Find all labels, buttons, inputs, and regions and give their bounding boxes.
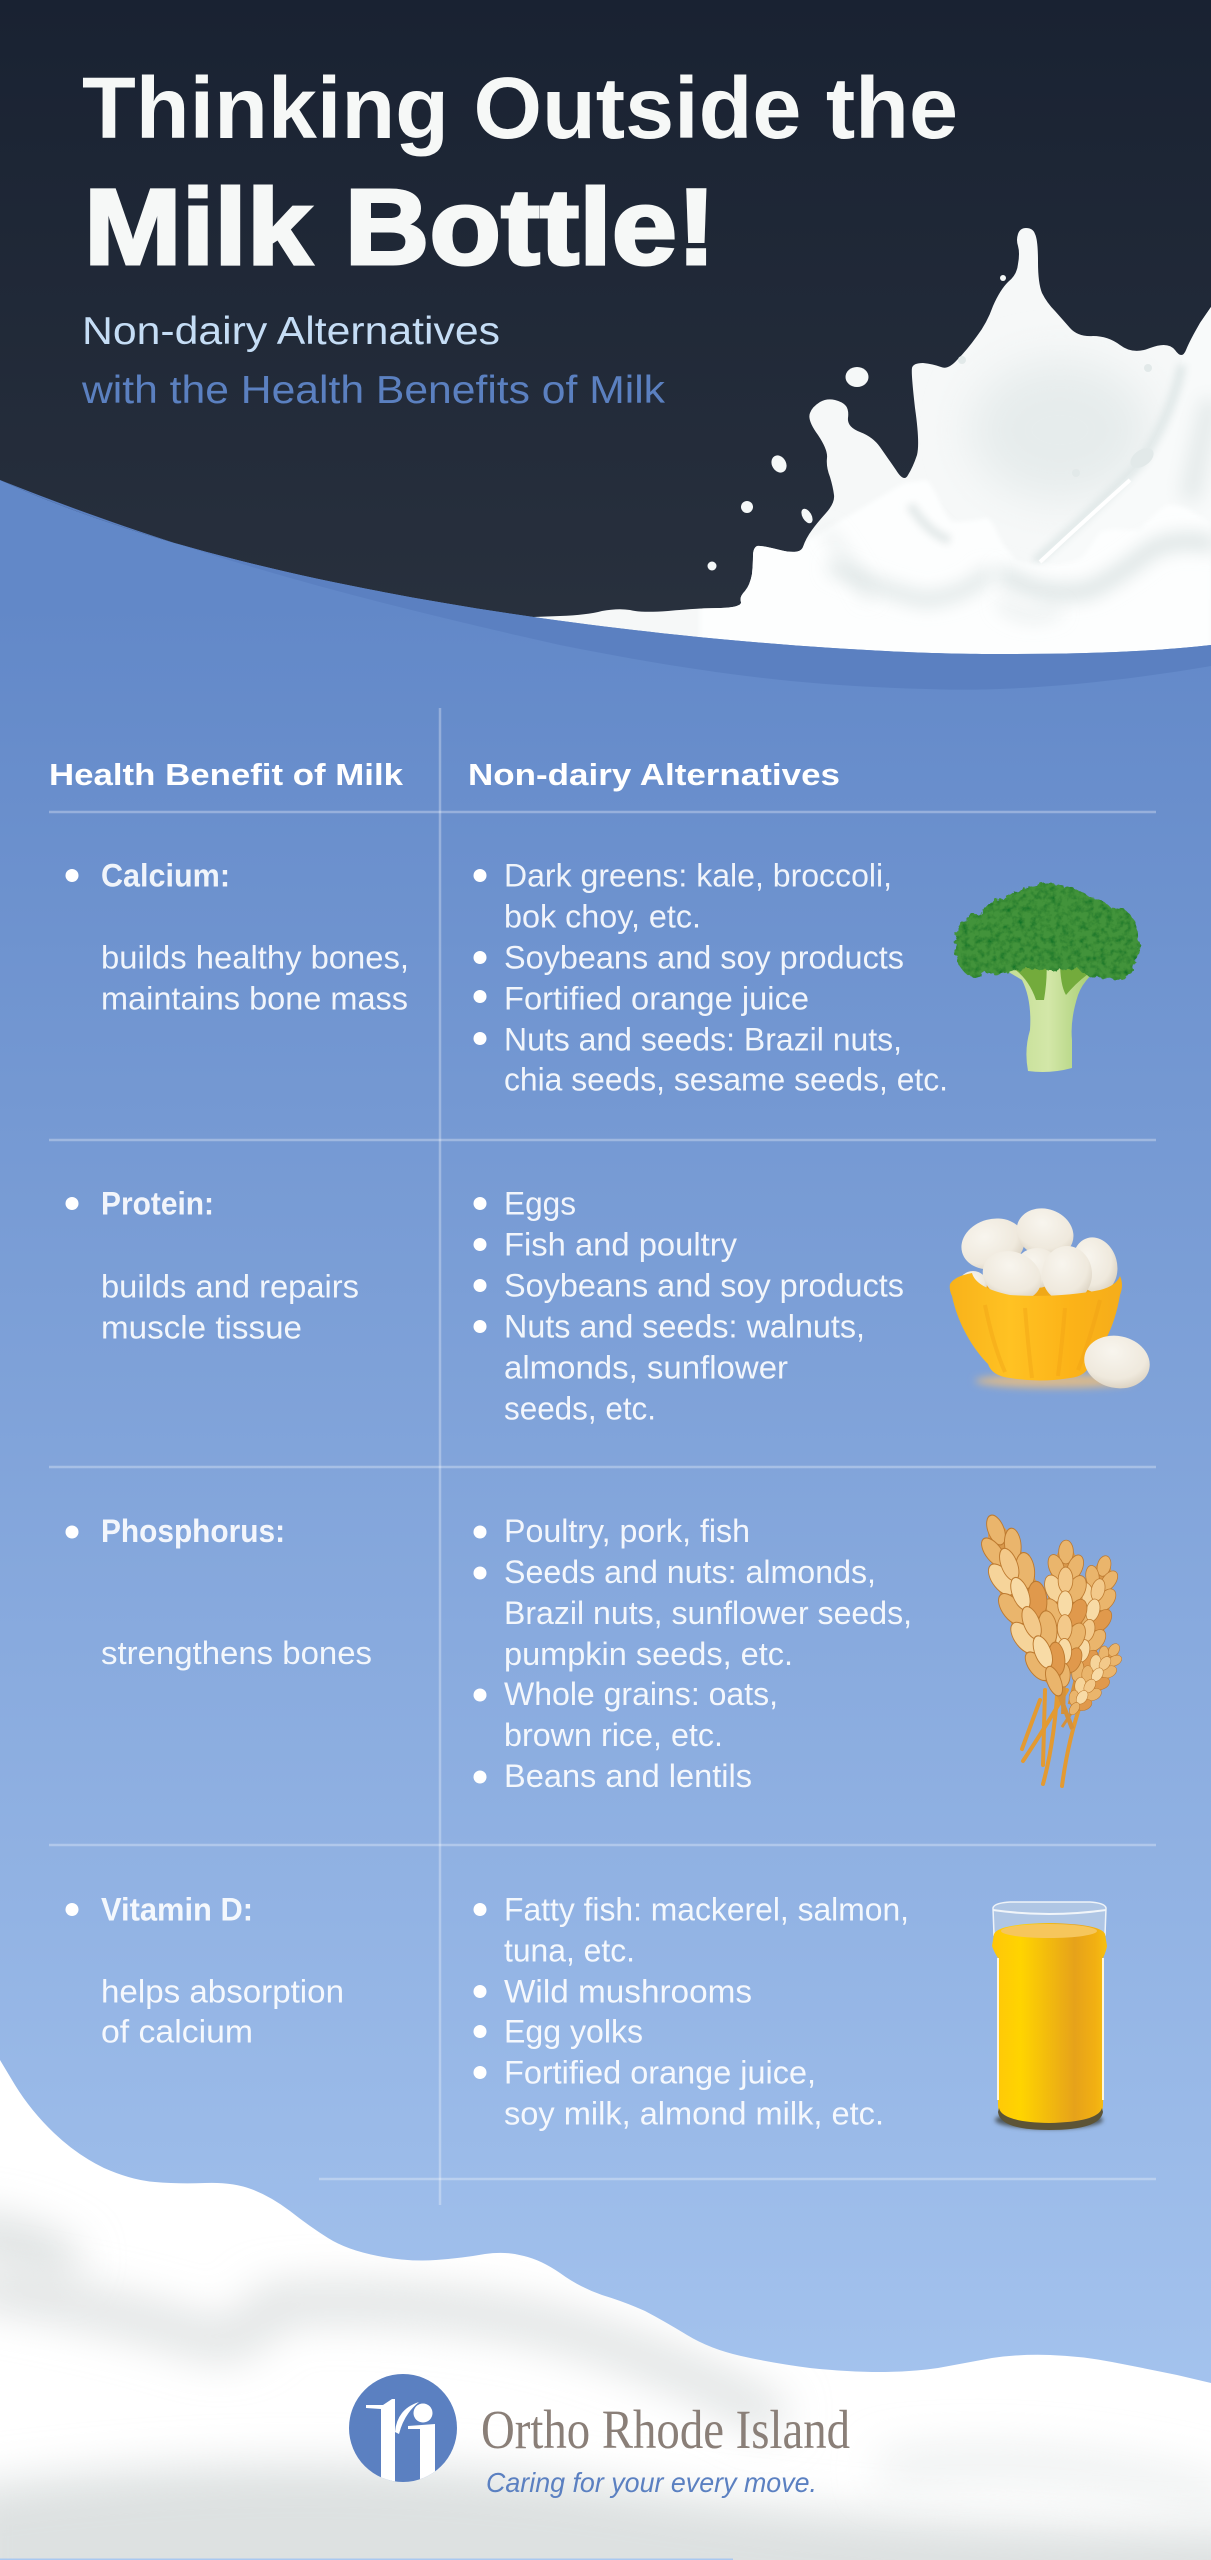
alternatives: phosphorus: Brazil nuts, sunflower seeds, [504,1595,912,1631]
benefit: protein: muscle tissue [101,1310,302,1346]
foreground wave [698,539,1040,609]
subtitle: with the Health Benefits of Milk [81,369,666,412]
alternatives: phosphorus: Seeds and nuts: almonds, [504,1554,876,1590]
right milk sheet [1198,307,1211,326]
alternatives: vitamin D: tuna, etc. [504,1932,635,1968]
alternatives: protein: Nuts and seeds: walnuts, [504,1308,865,1344]
alternatives: calcium: chia seeds, sesame seeds, etc. [504,1062,948,1098]
benefit: vitamin D: of calcium [101,2014,253,2050]
logo: Ortho Rhode Island [349,2374,850,2498]
dark blue wave band [0,480,1211,690]
alternatives: calcium [474,858,948,1098]
table header: Health Benefit of Milk [49,757,404,792]
icon: bowl of eggs [950,1201,1155,1394]
alternatives: phosphorus: pumpkin seeds, etc. [504,1636,793,1672]
alternatives: calcium: bok choy, etc. [504,898,701,934]
row: phosphorus [66,1505,1132,1794]
row: calcium [66,858,1139,1098]
benefit: protein: builds and repairs [101,1268,359,1304]
benefit: phosphorus: strengthens bones [101,1635,372,1671]
alternatives: vitamin D: soy milk, almond milk, etc. [504,2096,884,2132]
tagline: Caring for your every move. [486,2467,817,2498]
alternatives: phosphorus: Beans and lentils [504,1758,752,1794]
row: vitamin D [66,1892,1107,2132]
alternatives: phosphorus: Poultry, pork, fish [504,1513,750,1549]
alternatives: phosphorus: Whole grains: oats, [504,1676,778,1712]
alternatives: vitamin D [474,1892,909,2132]
icon: milk droplets [708,275,1006,570]
alternatives: calcium: Soybeans and soy products [504,940,904,976]
alternatives: vitamin D: Egg yolks [504,2014,643,2050]
table header [49,757,840,792]
alternatives: vitamin D: Fortified orange juice, [504,2054,816,2090]
subtitle: Non-dairy Alternatives [82,310,500,353]
brand name: Ortho Rhode Island [481,2399,850,2460]
icon: glass of juice [992,1902,1107,2130]
benefit: phosphorus: Phosphorus: [101,1513,285,1549]
alternatives: protein: Fish and poultry [504,1226,737,1262]
alternatives: protein: Eggs [504,1186,576,1222]
title [82,60,958,287]
alternatives: phosphorus [474,1513,912,1794]
bottom milk wave [0,2060,1211,2560]
benefit: calcium: builds healthy bones, [101,940,409,976]
alternatives: vitamin D: Wild mushrooms [504,1974,752,2010]
row: protein [66,1186,1155,1426]
alternatives: vitamin D: Fatty fish: mackerel, salmon, [504,1892,909,1928]
illustration: milk splash [534,228,1211,654]
icon: logo mark [349,2374,457,2490]
dark header background [0,0,1211,700]
alternatives: protein: seeds, etc. [504,1390,656,1426]
icon: broccoli [955,884,1139,1072]
benefit: calcium: Calcium: [101,858,230,894]
title: Thinking Outside the [82,60,958,157]
alternatives: protein [474,1186,904,1426]
alternatives: calcium: Fortified orange juice [504,980,809,1016]
alternatives: calcium: Nuts and seeds: Brazil nuts, [504,1022,902,1058]
table header: Non-dairy Alternatives [468,757,840,792]
alternatives: protein: Soybeans and soy products [504,1268,904,1304]
subtitle [81,310,666,412]
title: Milk Bottle! [84,166,716,287]
benefit: vitamin D: Vitamin D: [101,1892,253,1928]
table grid lines [49,708,1156,2205]
benefit: calcium [66,858,409,1016]
benefit: protein [66,1186,359,1346]
benefit: vitamin D: helps absorption [101,1974,344,2010]
benefit: vitamin D [66,1892,344,2050]
benefit: phosphorus [66,1513,372,1671]
alternatives: protein: almonds, sunflower [504,1350,788,1386]
benefit: calcium: maintains bone mass [101,980,408,1016]
icon: wheat [964,1505,1132,1786]
benefit: protein: Protein: [101,1186,214,1222]
alternatives: phosphorus: brown rice, etc. [504,1717,723,1753]
alternatives: calcium: Dark greens: kale, broccoli, [504,858,892,894]
